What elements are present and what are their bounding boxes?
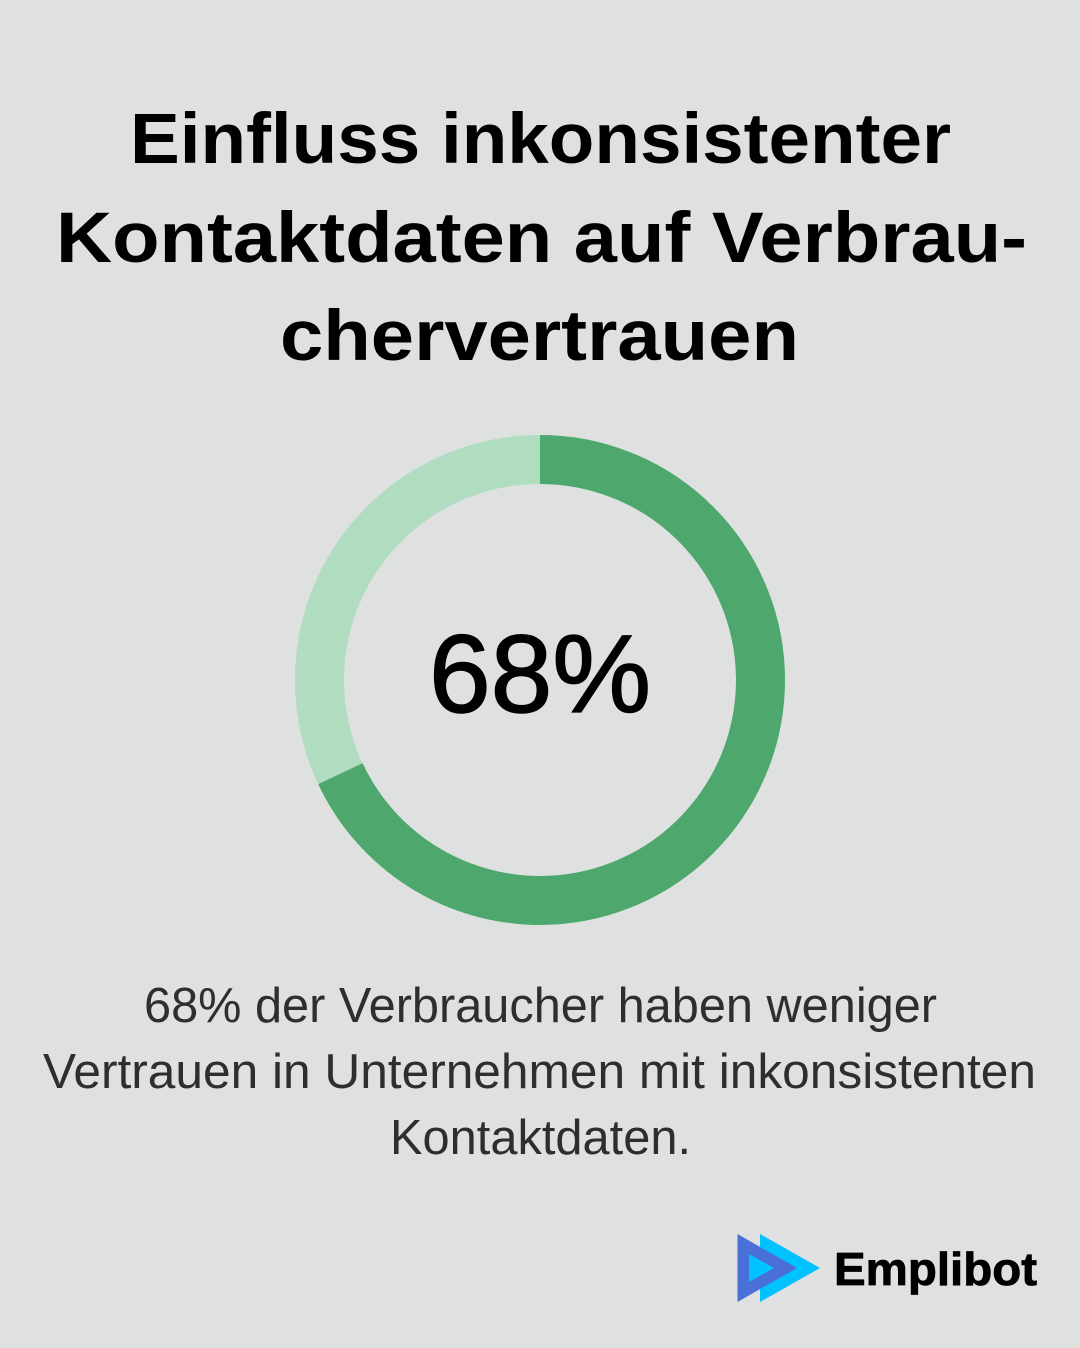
description text: Kontaktdaten. — [390, 1111, 691, 1165]
icon: play triangles — [738, 1234, 820, 1302]
donut chart: 68% — [320, 460, 760, 900]
logo wordmark: Emplibot — [834, 1243, 1037, 1295]
description text: Vertrauen in Unternehmen mit inkonsistenten — [43, 1045, 1036, 1099]
donut value: 68% — [429, 613, 651, 736]
description text — [43, 979, 1036, 1165]
title: Kontaktdaten auf Verbrau- — [56, 199, 1027, 278]
title: chervertrauen — [280, 297, 799, 376]
description text: 68% der Verbraucher haben weniger — [144, 979, 937, 1033]
logo: Emplibot — [738, 1234, 1037, 1302]
title — [56, 100, 1027, 376]
title: Einfluss inkonsistenter — [130, 100, 951, 179]
